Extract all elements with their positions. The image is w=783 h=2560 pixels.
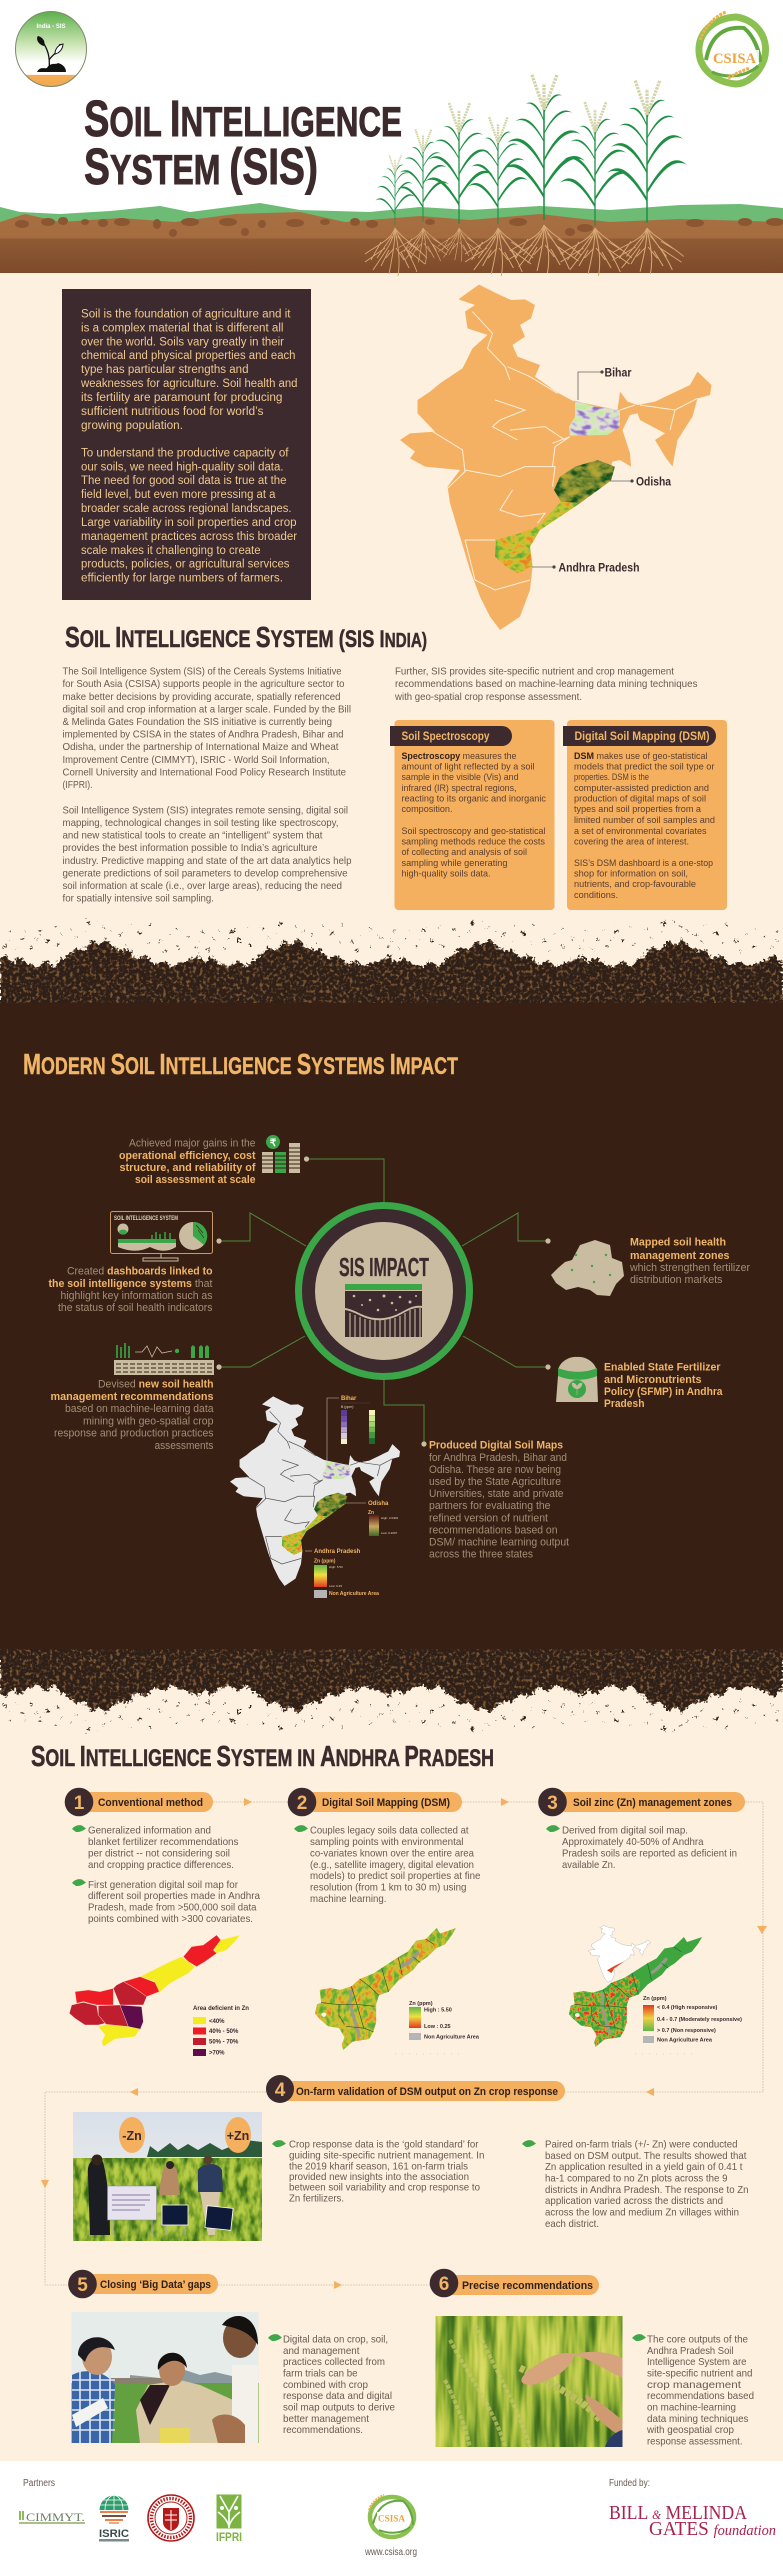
icon: monitor dashboard [110,1212,212,1261]
legend: Andhra Pradesh: Low: 0.25 [329,1584,342,1588]
body text: right column: recommendations based on machine-learning data mining techniques [395,678,698,690]
heading: SIS India: SOIL INTELLIGENCE SYSTEM (SIS INDIA) [65,622,427,654]
legend: > 0.7 (Non responsive) [657,2028,716,2034]
impact: digital soil maps text: refined version of nutrient [429,1512,548,1524]
impact: soil health management zones: Mapped soil health [630,1237,726,1249]
panel: Digital Soil Mapping: models that predict the soil type or [574,762,714,772]
bullets: First generation digital soil map for [88,1879,238,1891]
legend: Non Agriculture Area [424,2034,480,2040]
step 3: soil zinc management zones: 3 [547,1793,558,1814]
intro text: management practices across this broader [81,531,297,543]
footer: funded by label: Funded by: [609,2478,650,2489]
impact: dashboards: the status of soil health indicators [58,1302,213,1314]
panel: Soil Spectroscopy [390,720,554,910]
body text: left column: generate predictions of soil parameters to develop comprehensive [62,868,348,880]
icon: bars and rupee coin: ₹ [270,1138,277,1149]
map 2: DSM zinc map [315,1928,480,2054]
step 3: soil zinc management zones [538,1788,745,1871]
panel: Digital Soil Mapping: conditions. [574,890,618,901]
legend: Odisha: High: 2.0409 [381,1516,398,1520]
impact: new soil health management recommendations: management recommendations [50,1391,214,1403]
panel: Digital Soil Mapping: Digital Soil Mapping (DSM) [574,729,710,743]
leader lines and state labels: Andhra Pradesh [558,560,640,574]
logo: ISRIC [99,2495,129,2542]
panel: Digital Soil Mapping: properties. DSM is the [574,772,649,783]
panel: Digital Soil Mapping: DSM makes use of geo-statistical [574,751,708,762]
icon: fertilizer bag [556,1357,598,1402]
legend: Andhra Pradesh: Non Agriculture Area [329,1591,379,1597]
impact: digital soil maps text: Produced Digital Soil Maps [429,1440,563,1452]
step 6: precise recommendations: Precise recommendations [462,2280,593,2292]
step 6: precise recommendations [430,2269,599,2297]
step 6 text: with geospatial crop [646,2424,734,2436]
bullet: Pradesh soils are reported as deficient in [562,1848,737,1860]
step 5 text: better management [283,2413,369,2425]
panel: Soil Spectroscopy: amount of light reflected by a soil [402,762,534,772]
panel: Digital Soil Mapping: production of digital maps of soil [574,794,706,804]
body text: left column: soil information at scale (i.e., over large areas), reducing the need [62,880,342,892]
legend: Zn (ppm) [409,2001,433,2007]
impact: fertilizer policy: and Micronutrients [604,1374,702,1386]
impact: new soil health management recommendations: mining with geo-spatial crop [83,1416,214,1428]
icon: soil layers and crops [114,1343,214,1375]
intro text: Large variability in soil properties and crop [81,517,296,529]
panel: Soil Spectroscopy: sample in the visible (Vis) and [402,772,518,783]
step 5: closing big data gaps: 5 [77,2275,88,2296]
bullet [294,1824,481,1905]
step 4: on-farm validation: On-farm validation of DSM output on Zn crop response [296,2086,558,2098]
bullets: different soil properties made in Andhra [88,1890,260,1902]
step 5 text: and management [283,2345,360,2357]
step 6: precise recommendations: 6 [439,2274,449,2295]
impact: new soil health management recommendations: response and production practices [54,1428,214,1440]
panel: Soil Spectroscopy: reacting to its organic and inorganic [402,794,546,804]
step 6 text: response assessment. [647,2436,742,2448]
callouts -Zn and +Zn: -Zn [122,2129,142,2143]
panel: Soil Spectroscopy: Soil spectroscopy and geo-statistical [402,826,546,837]
panel: Soil Spectroscopy: high-quality soils data. [402,868,490,880]
step 5 text: combined with crop [283,2379,368,2391]
body text: left column: for spatially intensive soil sampling. [62,892,214,904]
icon: monitor dashboard: SOIL INTELLIGENCE SYSTEM [114,1216,178,1222]
impact: dashboards: the soil intelligence systems that [48,1278,212,1290]
step 4: on-farm validation: 4 [275,2080,286,2101]
icon: soil profile [345,1284,422,1337]
legend [635,1996,742,2054]
step 6 text: Andhra Pradesh Soil [647,2345,734,2357]
panel: Soil Spectroscopy: composition. [402,804,452,815]
heading: Andhra Pradesh: SOIL INTELLIGENCE SYSTEM IN ANDHRA PRADESH [31,1741,494,1773]
logo: India SIS badge: India - SIS [36,24,66,30]
step 5 text: soil map outputs to derive [283,2402,395,2414]
panel: Soil Spectroscopy: infrared (IR) spectral regions, [402,783,516,794]
impact: new soil health management recommendations: assessments [154,1440,214,1452]
callouts -Zn and +Zn: +Zn [227,2129,249,2143]
body text: left column: implemented by CSISA in the states of Andhra Pradesh, Bihar and [62,728,344,740]
legend: 0.4 - 0.7 (Moderately responsive) [657,2017,742,2023]
title: SOIL INTELLIGENCE [84,90,402,147]
map 1: area deficient in Zn [69,1935,249,2056]
intro text: our soils, we need high-quality soil data. [81,462,284,474]
impact: digital soil maps text: across the three states [429,1549,533,1561]
photo: field trial with -Zn and +Zn [73,2112,262,2241]
impact: operational efficiency [119,1135,300,1186]
impact: soil health management zones: which strengthen fertilizer [629,1262,750,1274]
body text: right column: Further, SIS provides site-specific nutrient and crop management [395,666,674,678]
map 3: Zn management zones [569,1925,742,2054]
bullets: points combined with >300 covariates. [88,1913,253,1925]
step 4 text: crop response: Crop response data is the ‘gold standard’ for [289,2138,479,2150]
bullet: Couples legacy soils data collected at [310,1824,469,1836]
impact: digital soil maps text: Universities, state and private [429,1488,564,1500]
bullets: Pradesh, made from >500,000 soil data [88,1902,257,1914]
bullet: available Zn. [562,1859,616,1871]
legend: Bihar: Bihar [341,1396,357,1402]
intro text: field level, but even more pressing at a [81,489,276,501]
step 6 text: on machine-learning [647,2402,736,2414]
step 6 text: Intelligence System are [647,2356,747,2368]
intro panel [62,289,311,600]
panel: Soil Spectroscopy: of collecting and analysis of soil [402,847,527,858]
legend: 40% - 50% [209,2029,239,2035]
impact: digital soil maps text: for Andhra Pradesh, Bihar and [429,1452,567,1464]
step 5 text: response data and digital [283,2390,392,2402]
icon: zone map [551,1240,624,1296]
step 1: conventional method: Conventional method [98,1797,203,1809]
inset map [588,1925,650,1982]
impact: operational efficiency: soil assessment at scale [135,1174,256,1186]
step 4 text: paired trials: application varied across the districts and [545,2195,723,2207]
legend: Andhra Pradesh [305,1549,379,1598]
impact: new soil health management recommendations: based on machine-learning data [65,1403,214,1415]
bullets: and cropping practice differences. [88,1859,234,1871]
panel: Digital Soil Mapping [563,720,727,910]
legend: Odisha [345,1501,398,1536]
step 4 text: paired trials [522,2138,749,2230]
step 4 text: crop response: Zn fertilizers. [289,2192,344,2204]
step 4 text: crop response [272,2138,485,2204]
logo: IFPRI [216,2494,242,2544]
impact: dashboards: Created dashboards linked to [67,1266,213,1278]
body text: right column [394,666,698,703]
bullets: Generalized information and [88,1824,211,1836]
panel: Digital Soil Mapping: shop for information on soil, [574,868,688,880]
bullet: models) to predict soil properties at fine [310,1870,481,1882]
step 6 text: recommendations based [647,2390,754,2402]
flow arrows and dotted connectors [41,1798,767,2289]
logo: IFPRI: IFPRI [216,2532,242,2544]
step 5 text: farm trials can be [283,2368,358,2380]
intro text: products, policies, or agricultural services [81,558,290,570]
step 6 text: data mining techniques [647,2413,748,2425]
legend: 50% - 70% [209,2040,239,2046]
logo: Bill and Melinda Gates Foundation [609,2502,776,2540]
intro text: To understand the productive capacity of [81,448,289,460]
body text: left column: mapping, technological changes in soil testing like spectroscopy, [62,817,338,829]
impact: digital soil maps text: Odisha. These are now being [429,1464,561,1476]
bullet: resolution (from 1 km to 30 m) using [310,1882,467,1894]
legend: >70% [209,2050,225,2056]
impact: fertilizer policy [556,1357,723,1410]
plants and roots [365,74,687,276]
body text: left column: provides the best information possible to India’s agriculture [62,842,318,854]
body text: left column: Odisha, under the partnership of International Maize and Wheat [62,741,339,753]
dark impact section background [0,1000,783,1660]
bullet: (e.g., satellite imagery, digital elevation [310,1859,474,1871]
panel: Digital Soil Mapping: types and soil properties from a [574,804,702,815]
impact: dashboards: highlight key information such as [60,1290,213,1302]
impact: dashboards [48,1212,213,1314]
impact: new soil health management recommendations: Devised new soil health [98,1379,214,1391]
panel: Digital Soil Mapping: a set of environmental covariates [574,826,707,837]
step 4 text: paired trials: each district. [545,2218,599,2230]
intro text: weaknesses for agriculture. Soil health and [80,378,298,390]
body text: right column: with geo-spatial crop response assessment. [394,691,582,703]
body text: left column: and new statistical tools to create an “intelligent” system that [62,830,323,842]
body text: left column: Improvement Centre (CIMMYT), ISRIC - World Soil Information, [62,754,330,766]
body text: left column: make better decisions by providing accurate, spatially referenced [62,691,341,703]
soil strata band [0,12,783,783]
intro text: broader scale across regional landscapes. [81,503,292,515]
impact: fertilizer policy: Pradesh [604,1398,645,1410]
step 4 text: crop response: between soil variability and crop response to [289,2182,480,2194]
body text: left column [62,666,352,904]
step 4 text: crop response: guiding site-specific nutrient management. In [289,2150,485,2162]
logo: CIMMYT: CIMMYT. [26,2510,85,2524]
soil texture band (top of dark section) [0,917,783,1003]
legend [395,2001,480,2054]
step 6 text: site-specific nutrient and [647,2368,753,2380]
step 2: digital soil mapping: Digital Soil Mapping (DSM) [322,1797,450,1809]
step 3: soil zinc management zones: Soil zinc (Zn) management zones [573,1797,732,1809]
step 4 text: paired trials: across the low and medium Zn villages within [545,2206,739,2218]
impact: digital soil maps text: DSM/ machine learning output [429,1537,569,1549]
step 4 text: paired trials: based on DSM output. The results showed that [545,2150,747,2162]
white India map with legends [230,1396,400,1598]
intro text: is a complex material that is different all [81,322,284,334]
legend: Andhra Pradesh: Andhra Pradesh [314,1549,361,1555]
step 4 text: crop response: the 2019 kharif season, 161 on-farm trials [289,2160,468,2172]
soil texture band (bottom of dark section) [0,1649,783,1735]
step 1: conventional method [65,1788,260,1925]
impact: fertilizer policy: Enabled State Fertilizer [604,1362,721,1374]
leader lines and state labels: Bihar [604,366,632,380]
photo: farmers with data device [72,2312,258,2443]
website: www.csisa.org [364,2547,417,2558]
intro text: scale makes it challenging to create [81,545,260,557]
bullet: sampling points with environmental [310,1836,464,1848]
legend: < 0.4 (High responsive) [657,2005,718,2011]
step 5 text: practices collected from [283,2356,385,2368]
legend: Area deficient in Zn [193,2006,249,2012]
impact: operational efficiency: Achieved major gains in the [129,1138,256,1150]
step 6 text: crop management [647,2379,741,2391]
intro text: Soil is the foundation of agriculture and it [81,308,291,320]
bullet: co-variates known over the entire area [310,1848,474,1860]
bullets [72,1824,260,1925]
bullet: Derived from digital soil map. [562,1824,688,1836]
step 1: conventional method: 1 [74,1793,85,1814]
step 4 text: crop response: provided new insights into the association [289,2171,469,2183]
logo: Cornell seal [148,2495,194,2541]
logo: CSISA top right [699,12,766,84]
body text: left column: digital soil and crop information at a larger scale. Funded by the Bill [62,704,351,716]
panel: Digital Soil Mapping: computer-assisted prediction and [574,783,709,794]
step 2: digital soil mapping: 2 [297,1793,307,1814]
impact: new soil health management recommendations [50,1343,214,1452]
title: SYSTEM (SIS) [84,138,318,195]
step 5: closing big data gaps: Closing ‘Big Data’ gaps [100,2279,211,2291]
legend: Odisha: Low: 0.2607 [381,1531,398,1535]
step 5 text: Digital data on crop, soil, [283,2334,388,2346]
body text: left column: for South Asia (CSISA) supports people in the agriculture sector to [62,678,345,690]
logo: Bill and Melinda Gates Foundation: BILL & MELINDA [609,2502,747,2524]
intro text: its fertility are paramount for producing [81,392,282,404]
panel: Digital Soil Mapping: covering the area of interest. [574,836,689,848]
impact: fertilizer policy: Policy (SFMP) in Andhra [604,1386,723,1398]
legend: <40% [209,2019,225,2025]
logo: CSISA top right: CSISA [713,51,757,67]
logo: ISRIC: ISRIC [99,2528,129,2540]
impact: digital soil maps text: recommendations based on [429,1524,558,1536]
legend: Low : 0.25 [424,2024,451,2030]
bullets: per district -- not considering soil [88,1848,230,1860]
panel: Digital Soil Mapping: SIS’s DSM dashboard is a one-stop [574,858,713,869]
India map with state overlays [400,285,712,630]
impact: digital soil maps text: used by the State Agriculture [429,1476,561,1488]
legend: Zn (ppm) [643,1996,667,2002]
intro text: efficiently for large numbers of farmers. [81,572,283,584]
legend: Odisha: Zn [368,1510,374,1516]
panel: Soil Spectroscopy: sampling while generating [402,858,508,869]
step 4 text: paired trials: districts in Andhra Pradesh. The response to Zn [545,2184,749,2196]
legend: Bihar [327,1396,375,1460]
body text: left column: & Melinda Gates Foundation the SIS initiative is currently being [62,716,332,728]
step 4: on-farm validation [266,2075,565,2103]
step 5: closing big data gaps [68,2270,218,2298]
step 4 text: paired trials: Zn application resulted in a yield gain of 0.41 t [545,2161,743,2173]
legend: Odisha: Odisha [368,1501,389,1507]
heading: impact: MODERN SOIL INTELLIGENCE SYSTEMS IMPACT [23,1049,458,1081]
bullet [546,1824,737,1871]
body text: left column: Soil Intelligence System (SIS) integrates remote sensing, digital soil [62,804,348,816]
body text: left column: The Soil Intelligence System (SIS) of the Cereals Systems Initiative [62,666,342,678]
SIS impact circle [298,1206,470,1376]
body text: left column: (IFPRI). [62,779,92,791]
logo: Bill and Melinda Gates Foundation: GATES foundation [649,2518,776,2540]
impact: operational efficiency: operational efficiency, cost [119,1150,256,1162]
intro text: sufficient nutritious food for world’s [81,406,264,418]
intro text: growing population. [81,420,183,432]
legend: Andhra Pradesh: High: 5.50 [329,1565,343,1569]
step 4 text: paired trials: ha-1 compared to no Zn plots across the 9 [545,2172,728,2184]
step 5 text: recommendations. [283,2424,363,2436]
impact: soil health management zones: management zones [630,1250,730,1262]
logo: India SIS badge [16,12,86,86]
step 2: digital soil mapping [288,1788,481,1905]
intro text: over the world. Soils vary greatly in their [81,336,284,348]
legend: Bihar: B (ppm) [341,1405,353,1409]
photo: rice panicles in hands [436,2316,622,2447]
intro text: The need for good soil data is true at the [81,475,286,487]
panel: Soil Spectroscopy: sampling methods reduce the costs [402,836,545,848]
legend: Andhra Pradesh: Zn (ppm) [314,1558,336,1564]
bullets: blanket fertilizer recommendations [88,1836,238,1848]
leader lines and state labels: Odisha [636,474,671,488]
step 6 text [632,2334,754,2448]
leader lines and state labels [532,366,671,574]
legend: High : 5.50 [424,2008,452,2014]
intro text [80,308,298,584]
intro text: chemical and physical properties and each [81,350,296,362]
impact: soil health management zones [551,1237,750,1296]
callouts -Zn and +Zn [119,2117,251,2153]
impact: digital soil maps text: partners for evaluating the [429,1500,550,1512]
legend [193,2006,249,2056]
logo: CSISA footer [369,2495,414,2537]
panel: Digital Soil Mapping: nutrients, and crop-favourable [574,879,696,890]
logo: CSISA footer: CSISA [378,2514,405,2524]
step 6 text: The core outputs of the [647,2334,748,2346]
panel: Soil Spectroscopy: Soil Spectroscopy [402,729,490,743]
step 5 text [268,2334,395,2436]
title [84,90,402,195]
connector lines [216,1156,551,1447]
bullet: machine learning. [310,1893,386,1905]
footer: partners label: Partners [23,2478,55,2489]
impact: soil health management zones: distribution markets [630,1274,723,1286]
intro text: type has particular strengths and [81,364,248,376]
bullet: Approximately 40-50% of Andhra [562,1836,704,1848]
legend: Non Agriculture Area [657,2038,713,2044]
body text: left column: industry. Predictive mapping and state of the art data analytics help [62,855,352,867]
panel: Digital Soil Mapping: limited number of soil samples and [574,815,715,826]
body text: left column: Cornell University and International Food Policy Research Institute [62,766,346,778]
impact: digital soil maps text [429,1440,569,1561]
impact: operational efficiency: structure, and reliability of [120,1162,256,1174]
SIS impact circle: SIS IMPACT [339,1252,429,1282]
step 4 text: paired trials: Paired on-farm trials (+/- Zn) were conducted [545,2138,738,2150]
icon: bars and rupee coin [262,1135,300,1173]
panel: Soil Spectroscopy: Spectroscopy measures the [402,751,516,762]
